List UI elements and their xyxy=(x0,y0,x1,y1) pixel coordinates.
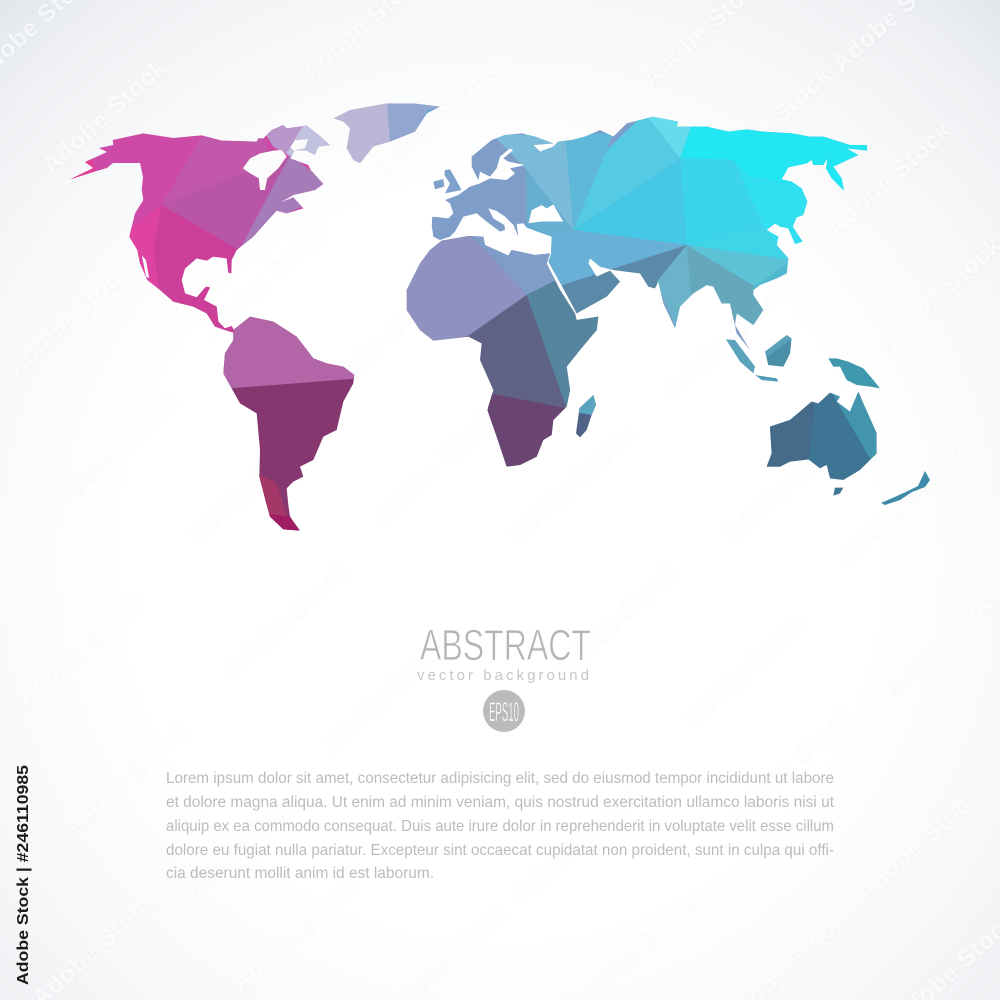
body text: Lorem ipsum dolor sit amet, consectetur adipisicing elit, sed do eiusmod tempor incididunt ut labore xyxy=(166,770,834,787)
britain xyxy=(444,169,462,193)
stock watermarks: Adobe Stock xyxy=(657,277,793,402)
body text xyxy=(166,770,835,882)
stock watermarks: Adobe Stock xyxy=(507,782,643,907)
stock watermarks: Adobe Stock xyxy=(502,422,638,547)
stock watermarks: Adobe Stock xyxy=(217,557,353,682)
java xyxy=(755,375,778,382)
stock watermarks: Adobe Stock xyxy=(832,442,968,567)
new zealand xyxy=(881,471,930,505)
madagascar xyxy=(576,395,596,438)
stock watermarks: Adobe Stock xyxy=(47,387,183,512)
subtitle: vector background xyxy=(417,667,589,684)
stock watermarks: Adobe Stock xyxy=(677,607,813,732)
tasmania xyxy=(833,488,843,496)
stock watermarks: Adobe Stock xyxy=(367,57,503,182)
africa xyxy=(406,236,598,467)
eurasia xyxy=(427,113,873,353)
stock watermarks: Adobe Stock xyxy=(722,702,858,827)
north america xyxy=(70,125,330,333)
south america xyxy=(223,316,354,531)
stock watermarks: Adobe Stock xyxy=(317,632,453,757)
stock watermarks: Adobe Stock xyxy=(547,557,683,682)
new guinea xyxy=(828,358,880,388)
stock watermarks: Adobe Stock xyxy=(312,277,448,402)
stock watermarks: Adobe Stock xyxy=(182,422,318,547)
stock watermarks: Adobe Stock xyxy=(57,717,193,842)
stock watermarks: Adobe Stock xyxy=(822,117,958,242)
stock watermarks: Adobe Stock xyxy=(12,587,148,712)
stock watermarks: Adobe Stock xyxy=(197,217,333,342)
stock watermarks: Adobe Stock xyxy=(717,422,853,547)
stock watermarks: Adobe Stock xyxy=(177,777,313,902)
body text: cia deserunt mollit anim id est laborum. xyxy=(166,865,434,882)
body text: dolore eu fugiat nulla pariatur. Excepteur sint occaecat cupidatat non proident, sunt in culpa qui offi- xyxy=(166,842,834,859)
stock id: Adobe Stock | #246110985 xyxy=(15,765,32,985)
text: EPS10 xyxy=(489,697,519,727)
stock watermarks: Adobe Stock xyxy=(367,402,503,527)
greenland xyxy=(334,103,440,164)
badge: EPS10 xyxy=(483,690,525,732)
body text: aliquip ex ea commodo consequat. Duis aute irure dolor in reprehenderit in voluptate velit esse cillum xyxy=(166,818,834,835)
australia xyxy=(766,392,877,480)
stock watermarks: Adobe Stock xyxy=(702,62,838,187)
stock watermarks: Adobe Stock xyxy=(2,257,138,382)
stock watermarks: Adobe Stock xyxy=(227,872,363,997)
title: ABSTRACT xyxy=(420,621,591,670)
borneo xyxy=(765,335,792,367)
ireland xyxy=(433,179,444,189)
world map xyxy=(60,97,930,537)
body text: et dolore magna aliqua. Ut enim ad minim veniam, quis nostrud exercitation ullamco laboris nisi ut xyxy=(166,794,835,811)
stock watermarks: Adobe Stock xyxy=(852,782,988,907)
sumatra xyxy=(726,339,755,373)
stock watermarks: Adobe Stock xyxy=(37,54,173,179)
